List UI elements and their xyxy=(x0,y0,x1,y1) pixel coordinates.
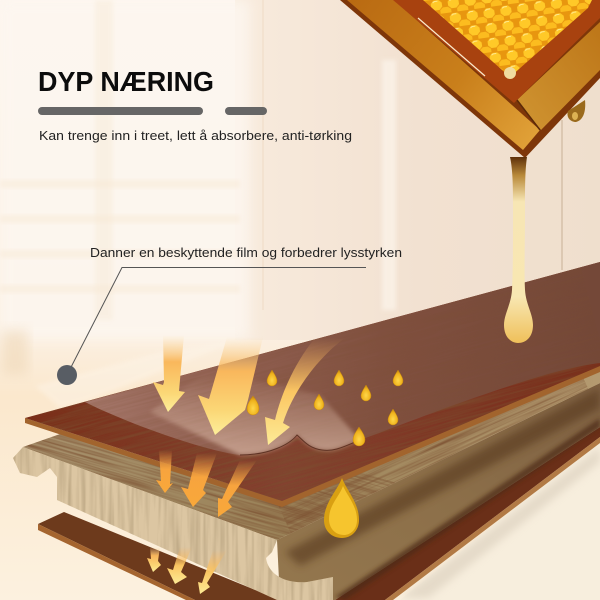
honeycomb xyxy=(393,0,600,103)
honey frame xyxy=(340,0,600,158)
plank front face xyxy=(13,447,333,600)
lower plank xyxy=(38,427,600,600)
small hanging drop xyxy=(567,100,585,122)
plank underside groove xyxy=(277,383,600,600)
plank top surface xyxy=(23,366,600,540)
pale film edge over background xyxy=(35,340,240,408)
title: DYP NÆRING xyxy=(38,66,214,97)
large honey drop xyxy=(324,478,359,538)
plank edge xyxy=(25,364,600,507)
protective film over the plank xyxy=(85,262,600,455)
red wood base xyxy=(25,262,600,501)
honey drops on the plank xyxy=(247,370,403,446)
honey drip xyxy=(504,157,533,343)
middle plank xyxy=(9,358,600,600)
callout leader line with dot xyxy=(57,268,366,385)
title underline bars xyxy=(38,107,267,115)
top plank xyxy=(25,262,600,507)
arrows: lower layer xyxy=(147,547,227,594)
arrows: top layer xyxy=(153,335,345,445)
arrows: middle layer xyxy=(156,450,257,517)
subtitle: Kan trenge inn i treet, lett å absorbere, anti-tørking xyxy=(39,128,352,143)
callout text: Danner en beskyttende film og forbedrer lysstyrken xyxy=(90,245,402,260)
